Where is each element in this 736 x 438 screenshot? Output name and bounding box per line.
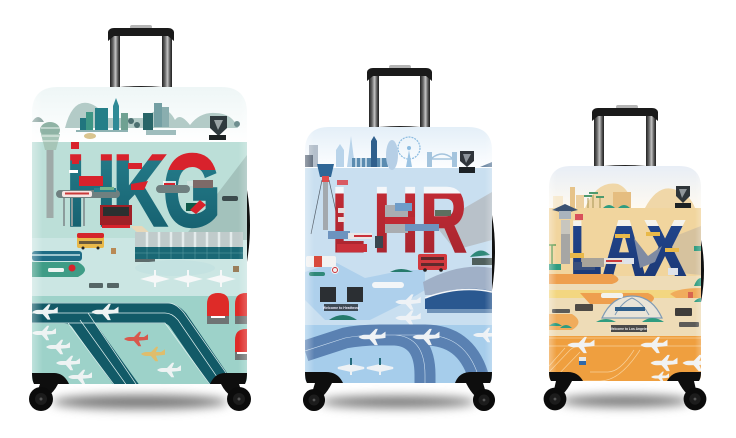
- letters HKG: K: [112, 133, 168, 248]
- gate planes: [144, 270, 232, 287]
- logo badge: [459, 151, 475, 173]
- wheels: [544, 372, 706, 410]
- control tower: [40, 122, 60, 218]
- train and green area: [32, 248, 239, 288]
- gate planes: [395, 294, 421, 326]
- red double decker bus: [418, 254, 447, 272]
- grey background slope: [182, 155, 247, 240]
- letters LHR: R: [420, 167, 467, 272]
- welcome sign: [323, 304, 360, 311]
- vehicles: [552, 292, 699, 327]
- welcome sign: Welcome to Los Angeles: [610, 327, 649, 331]
- runways: [549, 338, 701, 381]
- apron: [32, 296, 247, 384]
- gloss: [305, 127, 492, 383]
- floor shadows: [52, 395, 690, 409]
- welcome sign: Welcome to Heathrow: [323, 306, 360, 310]
- letters LHR: [328, 180, 467, 253]
- terminal building: [423, 267, 492, 313]
- double decker bus: [77, 233, 104, 250]
- theme building dome: [596, 296, 664, 322]
- hills: [65, 103, 238, 128]
- shuttle car: [222, 196, 238, 201]
- suitcase: LAX: [544, 105, 710, 410]
- letters LAX: X: [644, 204, 686, 293]
- skyline: [76, 98, 240, 139]
- ground shapes: [305, 250, 492, 320]
- left hill and logo: [32, 117, 44, 122]
- monorail track and train: [60, 187, 186, 228]
- planes: [568, 337, 710, 382]
- control tower: [549, 204, 578, 270]
- flag: [575, 214, 583, 220]
- side strap: [492, 215, 495, 290]
- wheels: [29, 373, 251, 411]
- case body: [305, 127, 497, 390]
- grey slope: [439, 192, 492, 248]
- letters LAX: [570, 204, 701, 293]
- flight-info screens: [320, 287, 363, 302]
- letters LHR: H: [373, 167, 419, 272]
- letters HKG: [69, 142, 218, 232]
- grey slope: [665, 226, 701, 275]
- runways: [305, 335, 478, 390]
- case body: [549, 166, 710, 382]
- planes: [338, 328, 492, 375]
- handle: [108, 25, 174, 87]
- apron: [549, 336, 701, 382]
- gloss: [32, 117, 247, 382]
- letters LAX: A: [602, 204, 646, 293]
- letters HKG: G: [163, 133, 221, 248]
- welcome sign: [610, 325, 649, 332]
- skyline: [553, 184, 695, 208]
- handle: [367, 65, 432, 127]
- letters LHR: L: [332, 167, 365, 272]
- logo badge: [209, 116, 227, 140]
- row of buildings: [135, 232, 243, 262]
- case body: [32, 87, 247, 390]
- hangars: [207, 293, 247, 360]
- handle: [592, 105, 658, 166]
- left train and roundel: [306, 256, 339, 276]
- sand and orange ground: [549, 274, 701, 336]
- apron: [305, 325, 492, 385]
- logo badge: [675, 186, 691, 208]
- suitcase: LHR: [303, 65, 497, 411]
- suitcase: HKG: [29, 25, 251, 411]
- letters LAX: L: [570, 204, 602, 293]
- planes: [32, 304, 181, 384]
- runways: [32, 302, 227, 384]
- skyline: [305, 136, 492, 170]
- letters HKG: H: [66, 133, 116, 248]
- wheels: [303, 372, 495, 411]
- tail tile: [579, 357, 586, 365]
- side strap: [701, 240, 704, 302]
- side strap: [247, 190, 250, 262]
- control tower: [310, 164, 336, 234]
- gloss: [549, 166, 701, 381]
- apron blob: [149, 261, 155, 262]
